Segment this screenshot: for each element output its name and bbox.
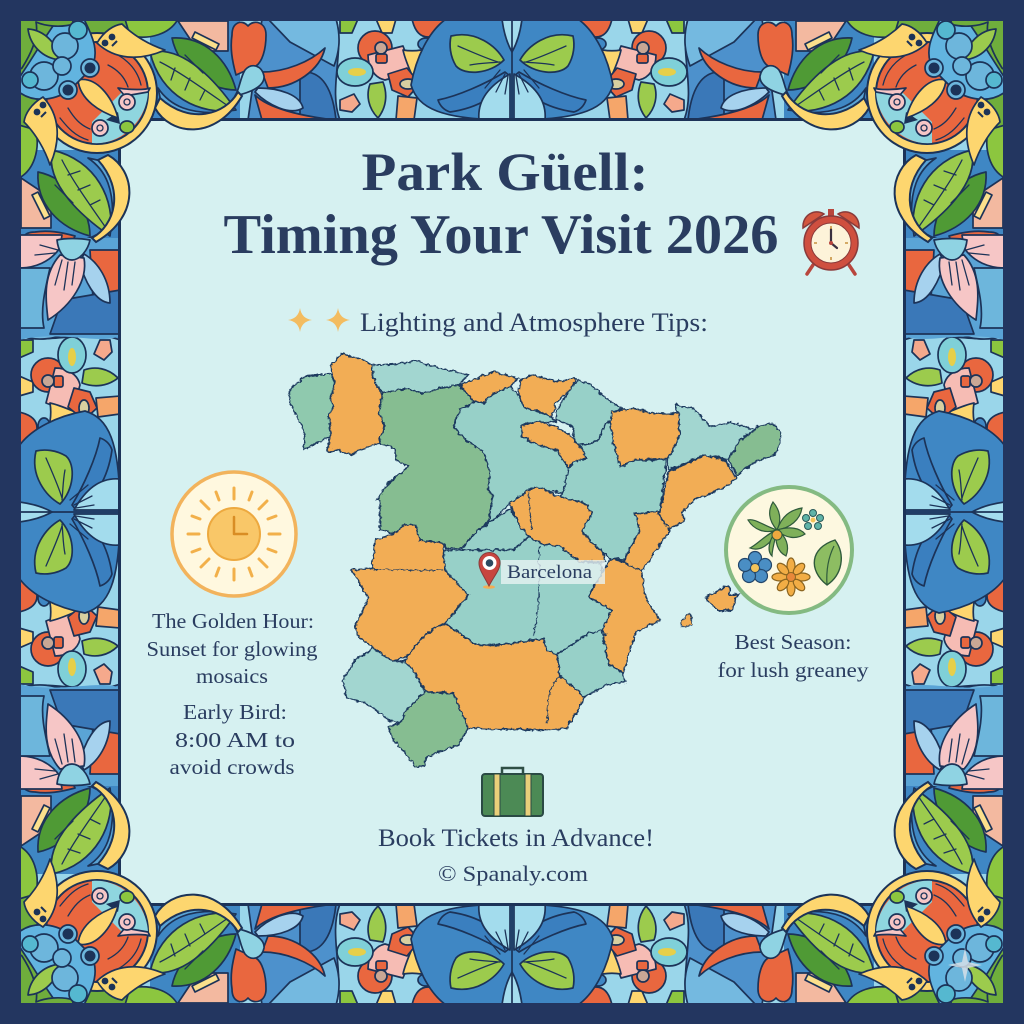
text: golden hour: Sunset for glowing <box>146 637 318 661</box>
text: best season <box>718 630 869 682</box>
text: best season: Best Season: <box>734 630 852 654</box>
title: Park Güell: <box>362 142 648 202</box>
text: early bird: 8:00 AM to <box>175 728 295 752</box>
subheading: lighting tips: Lighting and Atmosphere Tips: <box>360 308 708 337</box>
text: golden hour: The Golden Hour: <box>152 609 314 633</box>
content panel <box>119 119 905 905</box>
title <box>224 142 778 266</box>
icon: sparkles <box>288 308 350 332</box>
text: early bird: Early Bird: <box>183 700 287 724</box>
map of Spain <box>289 354 782 767</box>
icon: flowers and leaves badge <box>726 487 852 613</box>
text: golden hour: mosaics <box>196 664 268 688</box>
call to action: Book Tickets in Advance! <box>378 825 654 852</box>
title: Timing Your Visit 2026 <box>224 204 778 266</box>
icon: suitcase <box>482 768 543 816</box>
map label: Barcelona: Barcelona <box>507 562 593 583</box>
text: golden hour <box>146 609 318 688</box>
text: best season: for lush greaney <box>718 658 869 682</box>
credit: © Spanaly.com <box>438 861 588 886</box>
icon: map pin <box>479 552 500 589</box>
text: early bird <box>170 700 295 779</box>
text: early bird: avoid crowds <box>170 755 294 779</box>
icon: alarm clock <box>803 209 859 274</box>
map label: Barcelona <box>501 560 605 584</box>
icon: sun clock <box>172 472 296 596</box>
